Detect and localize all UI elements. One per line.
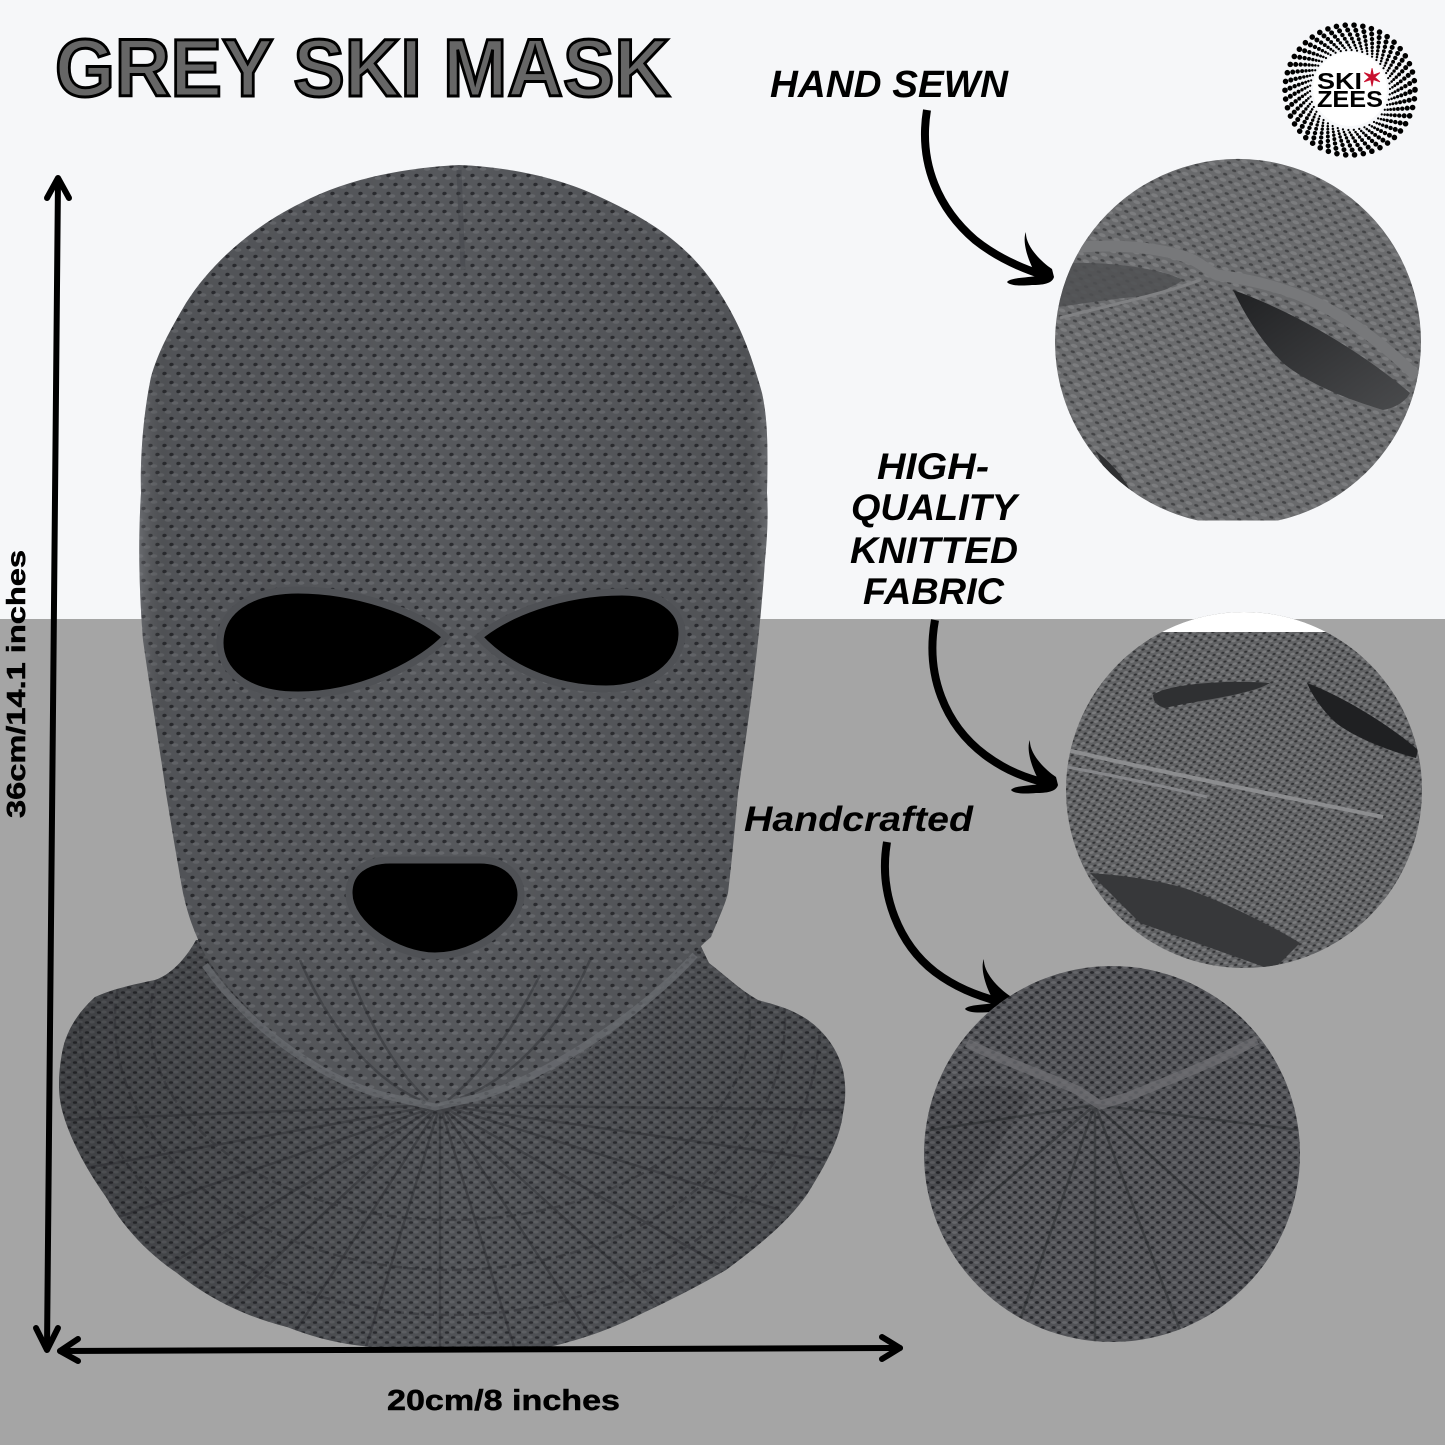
detail circle: handcrafted close-up [920, 960, 1305, 1345]
arrow: handcrafted [885, 842, 1012, 1013]
logo: Ski Zees: ZEES [1317, 86, 1383, 112]
seam at crown [459, 170, 463, 270]
width dimension arrow [60, 1337, 900, 1361]
background: grey lower area [0, 619, 1445, 1445]
title: GREY SKI MASK [55, 23, 670, 114]
logo: Ski Zees: SKI [1317, 68, 1362, 94]
callout label: handcrafted: Handcrafted [744, 800, 974, 839]
detail circle: hand sewn close-up [1050, 155, 1426, 525]
width label: 20cm/8 inches [387, 1385, 620, 1417]
head [139, 165, 768, 1107]
callout label: high-quality knitted fabric [850, 446, 1020, 612]
mouth hole [349, 860, 521, 956]
neck fold [205, 955, 695, 1107]
background: light upper area [0, 0, 1445, 619]
arrow: hand sewn [925, 110, 1054, 286]
callout label: hand sewn: HAND SEWN [770, 64, 1010, 106]
logo: Ski Zees: ✶ [1362, 65, 1382, 92]
callout label: high-quality knitted fabric: KNITTED [850, 530, 1018, 571]
logo: Ski Zees [1285, 25, 1415, 155]
height label: 36cm/14.1 inches [1, 550, 31, 818]
eye holes [220, 590, 682, 695]
ski mask product illustration [59, 165, 850, 1352]
callout label: high-quality knitted fabric: HIGH- [877, 446, 989, 487]
detail circle: knitted fabric close-up [1060, 605, 1430, 975]
height dimension arrow [36, 178, 69, 1350]
collar [59, 940, 846, 1347]
chin ribs [300, 960, 590, 1100]
callout label: high-quality knitted fabric: FABRIC [863, 571, 1005, 612]
arrow: knitted fabric [932, 620, 1058, 794]
callout label: high-quality knitted fabric: QUALITY [851, 487, 1020, 528]
